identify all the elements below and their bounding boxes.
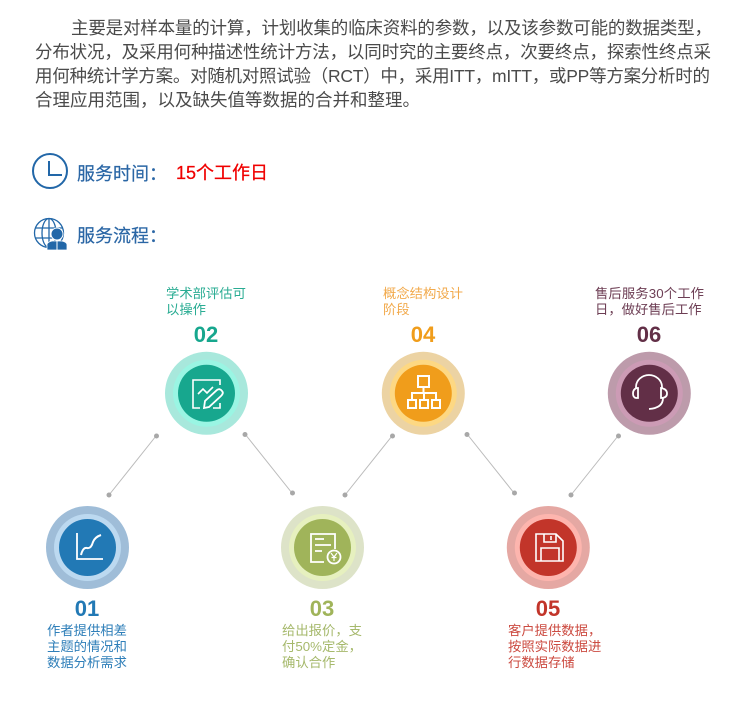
step 03 circle	[281, 506, 364, 589]
icon: globe with person	[34, 218, 67, 250]
step 05	[507, 506, 601, 670]
icon: clock	[33, 154, 67, 188]
service time label: 服务时间：	[77, 160, 167, 186]
step 01 circle	[46, 506, 129, 589]
icon: invoice with yen	[311, 534, 340, 564]
icon: floppy disk	[536, 534, 563, 561]
step 04 number: 04	[411, 322, 436, 347]
step 03 description	[282, 620, 362, 670]
step 02 description: 以操作	[166, 302, 206, 317]
icon: headset	[633, 375, 667, 409]
intro paragraph: 主要是对样本量的计算，计划收集的临床资料的参数，以及该参数可能的数据类型，	[71, 15, 712, 40]
step 01 description: 主题的情况和	[47, 639, 127, 654]
step 01 description: 数据分析需求	[47, 655, 127, 670]
service time value: 15个工作日	[176, 163, 268, 183]
step 02	[165, 286, 248, 435]
step 06 description	[595, 286, 704, 318]
step 02 description: 学术部评估可	[166, 286, 246, 301]
step 03 description: 付50%定金，	[282, 636, 362, 655]
step 03 description: 确认合作	[282, 655, 335, 670]
step 05 description: 客户提供数据，	[508, 620, 601, 639]
service process label: 服务流程：	[77, 222, 167, 248]
step 04 description	[383, 285, 463, 317]
step 05 number: 05	[536, 596, 560, 621]
step 01 description: 作者提供相差	[47, 623, 127, 638]
step 06	[595, 286, 704, 435]
step 02 circle	[165, 352, 248, 435]
step 01	[46, 506, 129, 670]
icon: chart and pencil	[193, 380, 223, 408]
step 01 number: 01	[75, 596, 99, 621]
step 03 number: 03	[310, 596, 334, 621]
step 03 description: 给出报价，支	[282, 620, 362, 639]
step 05 circle	[507, 506, 590, 589]
step 06 description: 售后服务30个工作	[595, 286, 704, 301]
intro paragraph: 合理应用范围，以及缺失值等数据的合并和整理。	[35, 87, 420, 112]
step 03	[281, 506, 364, 670]
step 05 description: 行数据存储	[508, 655, 575, 670]
step 04 description: 概念结构设计	[383, 285, 463, 301]
step 02 description	[166, 286, 246, 317]
step 06 description: 日，做好售后工作	[595, 299, 702, 318]
step 06 circle	[608, 352, 691, 435]
connector lines	[106, 432, 621, 498]
step 06 number: 06	[637, 322, 661, 347]
step 04	[382, 285, 465, 435]
step 02 number: 02	[194, 322, 218, 347]
icon: org chart	[408, 376, 440, 408]
step 01 description	[47, 623, 127, 670]
step 04 circle	[382, 352, 465, 435]
intro paragraph: 用何种统计学方案。对随机对照试验（RCT）中，采用ITT，mITT，或PP等方案分析时的	[35, 63, 710, 88]
icon: line chart	[77, 533, 103, 559]
intro paragraph: 分布状况，及采用何种描述性统计方法，以同时究的主要终点，次要终点，探索性终点采	[35, 39, 711, 64]
step 04 description: 阶段	[383, 302, 410, 317]
intro paragraph	[35, 15, 712, 112]
step 05 description	[508, 620, 601, 670]
step 05 description: 按照实际数据进	[508, 639, 601, 654]
